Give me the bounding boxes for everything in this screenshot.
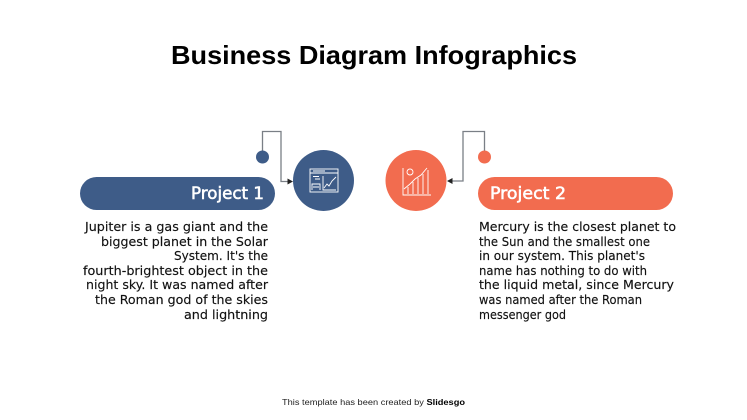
description: project 1: and lightning xyxy=(184,307,268,322)
description: project 2: Mercury is the closest planet to xyxy=(479,219,676,234)
icon circle: dashboard chart xyxy=(293,150,354,211)
connector dot: project 2 xyxy=(478,150,491,164)
description: project 2: the liquid metal, since Mercury xyxy=(479,277,675,292)
title: Business Diagram Infographics xyxy=(171,40,577,70)
description: project 2: name has nothing to do with xyxy=(479,263,647,278)
description: project 2 xyxy=(479,219,676,322)
description: project 1 xyxy=(83,219,269,322)
label pill: project 1: Project 1 xyxy=(191,184,264,203)
label pill: project 2: Project 2 xyxy=(490,184,566,203)
panel: project 1 xyxy=(80,132,354,322)
label pill: project 1 xyxy=(80,177,275,210)
connector arrow: project 2 xyxy=(447,132,484,184)
description: project 1: the Roman god of the skies xyxy=(95,292,268,307)
description: project 1: biggest planet in the Solar xyxy=(101,234,269,249)
description: project 1: System. It's the xyxy=(174,248,268,263)
connector arrow: project 1 xyxy=(262,132,293,184)
description: project 1: fourth-brightest object in the xyxy=(83,263,268,278)
connector dot: project 1 xyxy=(256,150,269,164)
label pill: project 2 xyxy=(478,177,673,210)
description: project 2: the Sun and the smallest one xyxy=(479,234,650,249)
footer credit: This template has been created by Slidesgo xyxy=(282,397,465,407)
panel: project 2 xyxy=(386,132,676,322)
description: project 2: messenger god xyxy=(479,307,566,322)
description: project 2: was named after the Roman xyxy=(479,292,642,307)
description: project 1: night sky. It was named after xyxy=(86,277,269,292)
description: project 1: Jupiter is a gas giant and the xyxy=(84,219,268,234)
icon circle: growth chart xyxy=(386,150,446,211)
description: project 2: in our system. This planet's xyxy=(479,248,645,263)
